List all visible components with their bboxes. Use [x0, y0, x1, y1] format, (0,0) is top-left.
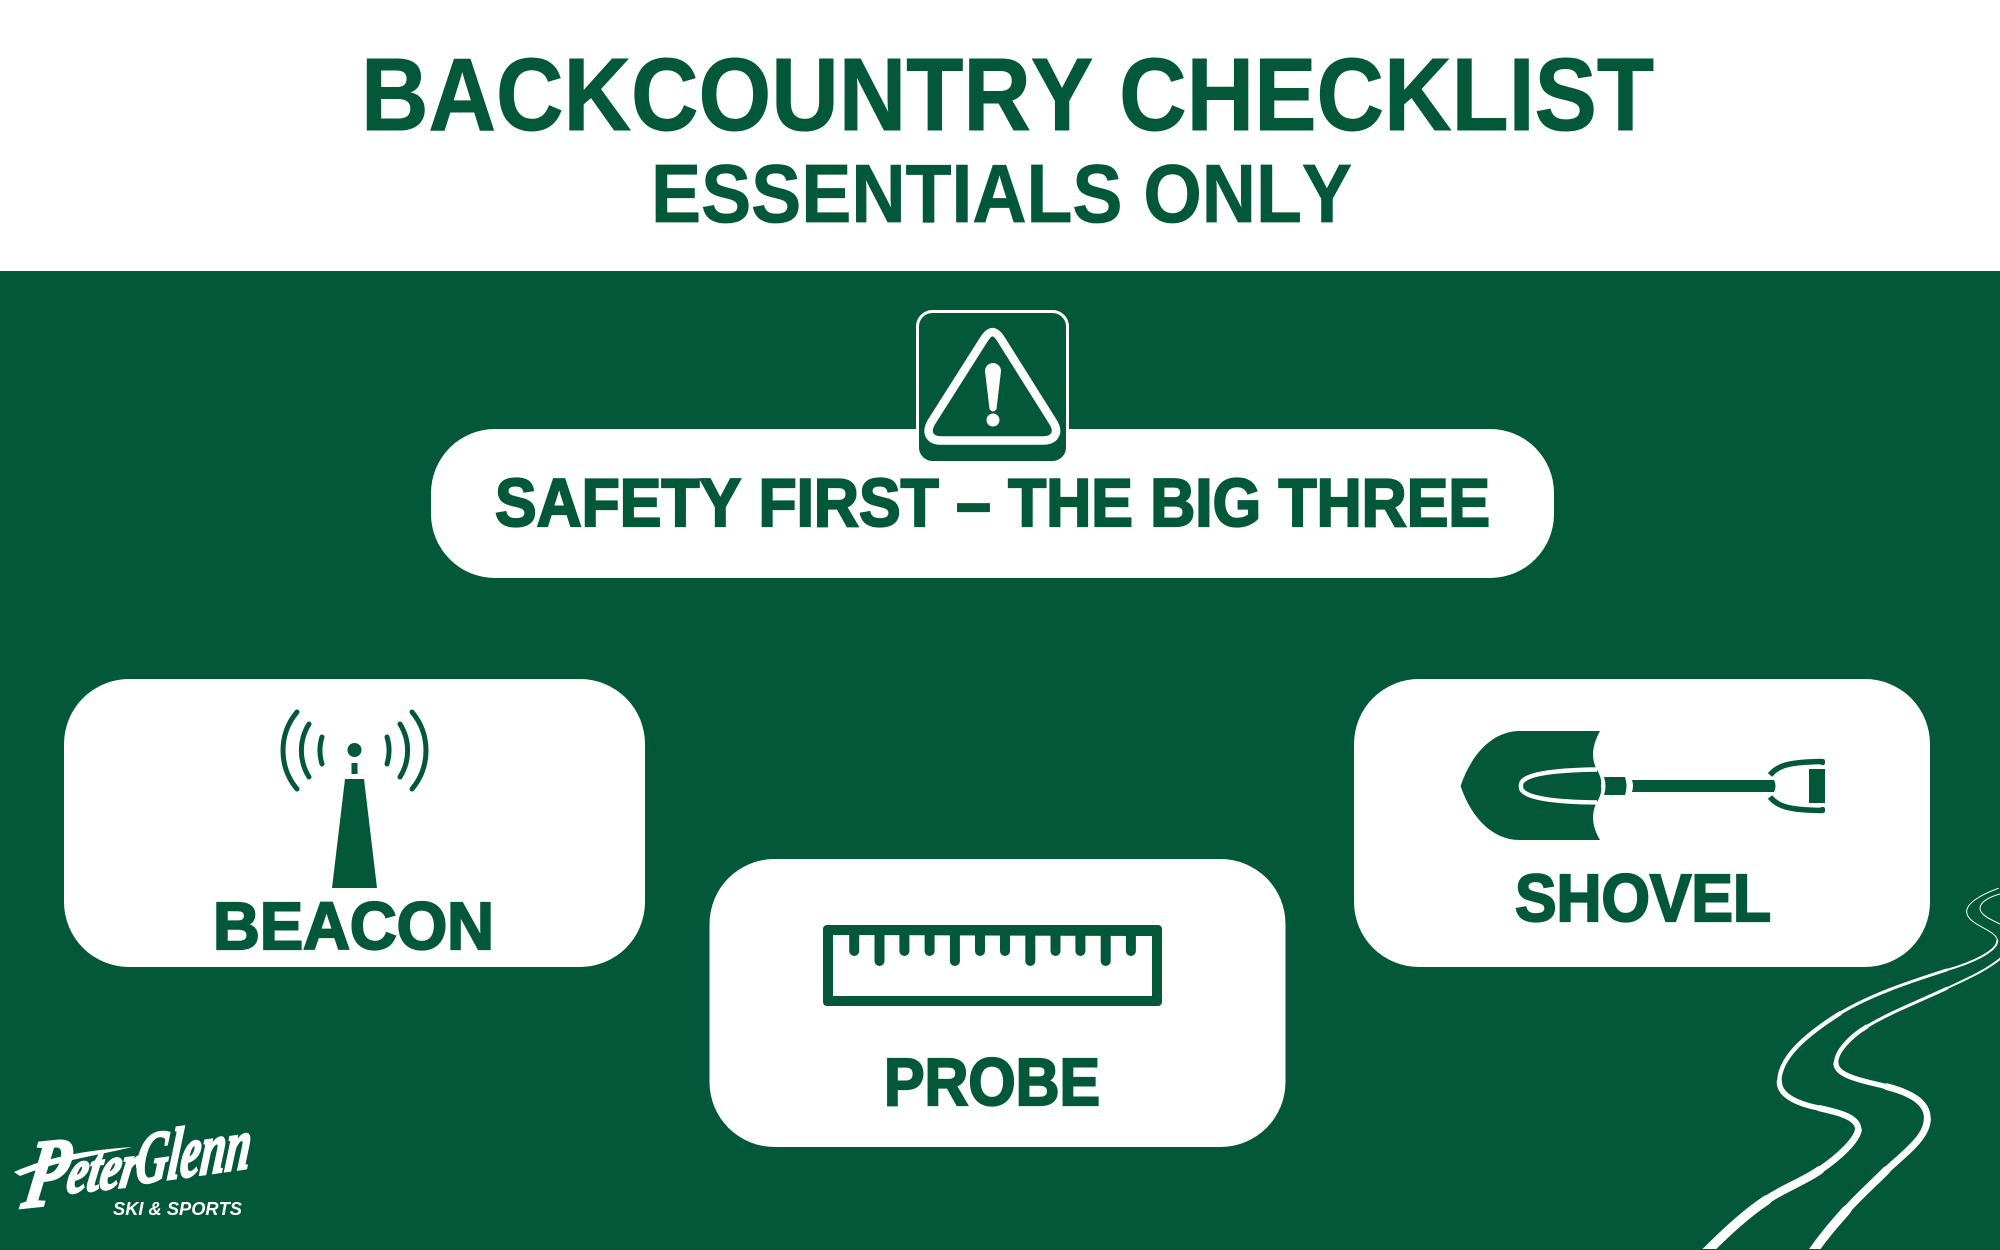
- icon: warning triangle: [918, 312, 1068, 462]
- logo: Peter Glenn Ski & Sports: SKI & SPORTS: [113, 1199, 242, 1219]
- logo flourish: [14, 1147, 132, 1176]
- label: beacon: BEACON: [213, 889, 494, 964]
- icon: radio beacon tower: [283, 712, 426, 888]
- panel: probe: [710, 859, 1286, 1147]
- logo: Peter Glenn Ski & Sports: P: [16, 1116, 79, 1230]
- panel: shovel: [1354, 679, 1930, 967]
- icon: ruler probe: [823, 925, 1162, 1006]
- subtitle: ESSENTIALS ONLY: [651, 147, 1352, 240]
- title: BACKCOUNTRY CHECKLIST: [361, 37, 1654, 152]
- logo: Peter Glenn Ski & Sports: [14, 1102, 256, 1230]
- heading text: safety first: SAFETY FIRST – THE BIG THREE: [495, 465, 1490, 541]
- label: probe: PROBE: [884, 1045, 1100, 1120]
- logo: Peter Glenn Ski & Sports: eter: [62, 1130, 147, 1208]
- decorative ski trail: [1703, 888, 2000, 1250]
- panel: beacon: [64, 679, 645, 967]
- label: shovel: SHOVEL: [1515, 861, 1771, 936]
- logo: Peter Glenn Ski & Sports: Glenn: [132, 1102, 256, 1200]
- panel: safety first heading: [431, 429, 1554, 578]
- green background panel: [0, 271, 2000, 1250]
- icon: shovel: [1461, 731, 1825, 840]
